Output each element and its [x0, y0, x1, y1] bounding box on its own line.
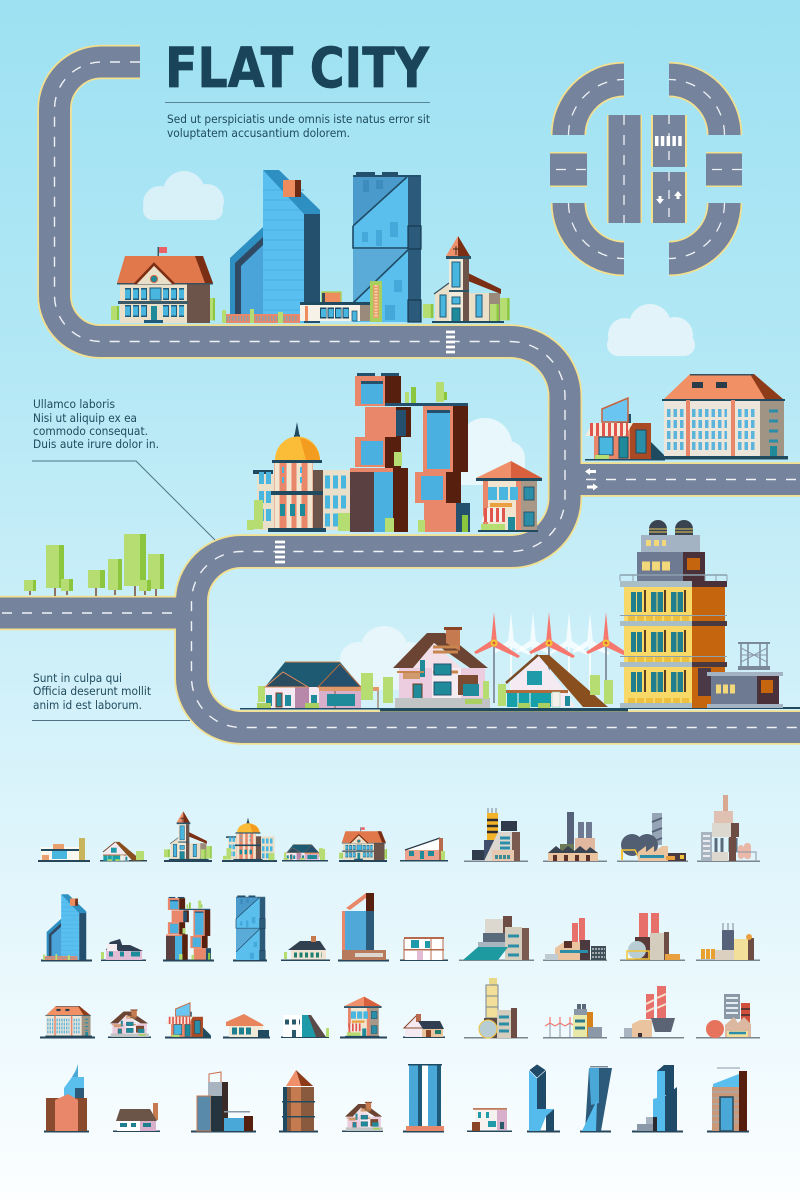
icon: white modern house	[400, 937, 448, 961]
middle scene: modular tower	[350, 373, 470, 532]
icon grid: row 3	[40, 978, 760, 1038]
lower scene: rooftop rack annex	[698, 642, 783, 708]
icon: blue tower	[41, 894, 92, 962]
icon: brick tower	[44, 1064, 89, 1132]
middle scene: domed hall	[247, 422, 350, 532]
icon: brown roof house	[113, 1103, 160, 1132]
title: FLAT CITY	[165, 36, 430, 100]
icon: teal spire tower	[279, 1070, 318, 1132]
lower scene: teal house	[257, 662, 379, 708]
right branch: shop	[585, 398, 665, 460]
icon: stepped blue tower	[632, 1065, 683, 1132]
crosswalk: middle road	[275, 542, 285, 562]
intro text	[167, 112, 430, 140]
cloud: behind lower houses	[337, 626, 428, 690]
icon grid: row 2	[41, 893, 760, 962]
lower scene: wind turbines	[474, 612, 632, 703]
road piece: bottom-right curve	[669, 203, 741, 275]
icon: small turbines plant	[543, 1004, 607, 1038]
trees on left road	[24, 534, 164, 596]
road piece: long straight	[607, 115, 642, 223]
main road	[0, 62, 800, 728]
crosswalk: upper road	[446, 332, 455, 352]
leader line: lower note	[32, 720, 190, 722]
icon: orange roof villa	[223, 1014, 270, 1038]
icon: dark roof two-storey house	[101, 939, 146, 961]
icon: church	[164, 811, 212, 862]
arrows on branch road	[585, 468, 598, 490]
top scene: school	[111, 247, 215, 323]
side note: lower: anim id est laborum.	[33, 698, 142, 712]
icon: twin blue towers	[403, 1064, 444, 1132]
lower scene: chalet house	[393, 627, 490, 708]
icon: red chimney factory	[543, 918, 607, 961]
icon: pink cottage	[108, 1009, 151, 1038]
lower scene: ground strip	[240, 707, 800, 712]
intro text: Sed ut perspiciatis unde omnis iste natus error sit	[167, 112, 430, 126]
side note: lower	[33, 671, 151, 712]
side note: lower: Sunt in culpa qui	[33, 671, 122, 685]
road kit pieces	[550, 63, 742, 275]
title rule	[165, 102, 430, 103]
icon: scaffold tower plant	[696, 994, 760, 1038]
road piece: top-right curve	[669, 63, 741, 135]
icon: twisted tower	[580, 1066, 612, 1132]
middle scene: small house	[476, 461, 542, 532]
icon: lattice tower plant	[464, 978, 528, 1038]
road piece: top-left curve	[552, 63, 624, 135]
cloud: behind modular tower	[450, 418, 525, 485]
right branch: apartments	[662, 374, 788, 460]
icon: chalet	[342, 1102, 383, 1132]
top scene: glass tower	[353, 172, 421, 322]
icon: apartments	[40, 1006, 95, 1038]
icon: low modern building	[38, 838, 90, 862]
cloud: right of top scene	[607, 304, 695, 356]
icon: orange roof townhouse	[340, 997, 387, 1038]
cloud: near title	[143, 171, 224, 220]
lower scene: trees	[383, 675, 613, 706]
icon: colourful villa	[467, 1108, 512, 1132]
icon: twin stack plant	[620, 913, 685, 961]
top scene: low building	[300, 281, 382, 322]
icon: modular tower	[163, 897, 214, 962]
icon: tall glass office	[338, 893, 389, 962]
leader line: upper note	[32, 461, 215, 540]
icon: glass tower	[233, 896, 267, 962]
icon: slope roof house	[100, 842, 147, 862]
side note: upper: Nisi ut aliquip ex ea	[33, 411, 137, 425]
icon: dome tank refinery	[617, 813, 688, 862]
road piece: crosswalk straight	[651, 115, 687, 167]
icon: dark roof cottage	[403, 1014, 445, 1038]
road piece: bottom-left curve	[552, 203, 624, 275]
road piece: right stub	[706, 152, 742, 187]
icon: solar factory	[459, 916, 534, 961]
icon: striped office	[707, 1068, 749, 1132]
icon: twin stack vat plant	[620, 986, 684, 1038]
road piece: arrows straight	[651, 172, 687, 223]
icon grid: row 4	[44, 1064, 749, 1132]
icon: domed hall	[222, 818, 277, 862]
icon: glass office cluster	[191, 1072, 256, 1132]
side note: upper	[33, 397, 159, 451]
side note: upper: commodo consequat.	[33, 424, 148, 438]
icon grid: row 1	[38, 795, 760, 862]
side note: upper: Ullamco laboris	[33, 397, 115, 411]
icon: dark slope house	[281, 1015, 329, 1038]
icon: orange tank plant	[696, 923, 760, 961]
side note: upper: Duis aute irure dolor in.	[33, 437, 159, 451]
lower scene: yellow tower	[620, 520, 727, 708]
icon: shop	[165, 1003, 211, 1038]
icon: slanted roof house	[400, 838, 448, 862]
lower scene: ghost turbines	[493, 612, 610, 698]
icon: small teal house	[282, 844, 328, 862]
road piece: left stub	[550, 152, 587, 187]
top scene: blue tower	[222, 170, 320, 323]
icon: grey chimney factory	[543, 812, 607, 862]
side note: lower: Officia deserunt mollit	[33, 684, 151, 698]
intro text: voluptatem accusantium dolorem.	[167, 126, 350, 140]
icon: school	[339, 827, 387, 862]
icon: dark roof bungalow	[281, 936, 330, 961]
icon: yellow stripe factory	[464, 808, 528, 862]
lower scene: slope-roof house	[506, 655, 608, 708]
icon: tall process plant	[697, 795, 760, 862]
top scene: church	[423, 236, 510, 323]
icon: notched blue tower	[527, 1064, 560, 1132]
